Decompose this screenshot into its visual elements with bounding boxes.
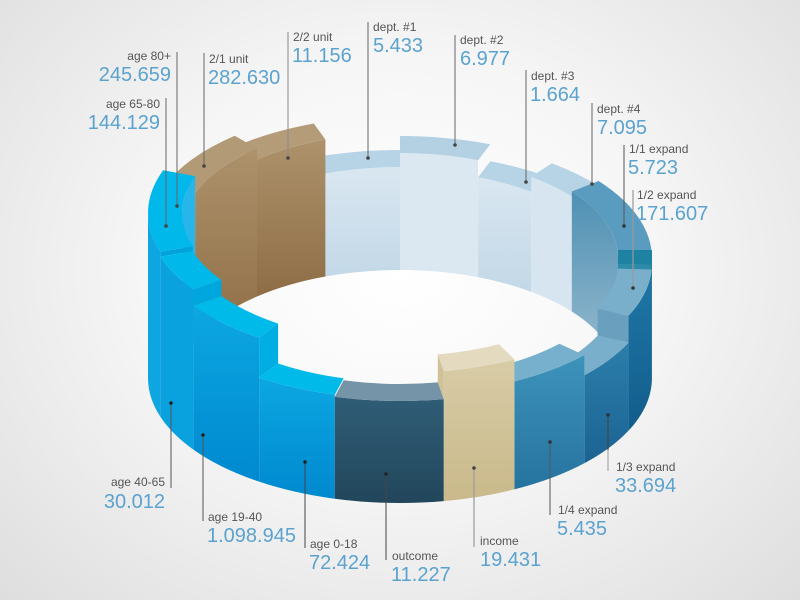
segment: age 0-18 — [259, 324, 344, 499]
callout: 2/1 unit: 282.630 — [208, 67, 280, 89]
callout: income: 19.431 — [480, 549, 541, 571]
callout: dept. #2 — [453, 33, 510, 147]
segment: dept #3 — [478, 161, 552, 292]
segment: 1/1 expand — [572, 181, 652, 384]
callout: 1/1 expand: 5.723 — [628, 157, 678, 179]
callout: 1/3 expand: 1/3 expand — [616, 460, 675, 474]
callout: age 80+ — [99, 49, 179, 208]
callout: dept. #3 — [524, 69, 580, 184]
callout: age 40-65: 30.012 — [104, 491, 165, 513]
callout: 2/2 unit — [286, 30, 352, 160]
segment: income — [438, 344, 514, 501]
segment: 1/2 expand — [598, 269, 652, 431]
callout: 2/1 unit — [202, 52, 280, 168]
callout: age 65-80: 144.129 — [88, 112, 160, 134]
segment: age 19-40 — [194, 280, 278, 482]
callout: dept. #2: 6.977 — [460, 48, 510, 70]
callout: dept. #1: 5.433 — [373, 35, 423, 57]
callout: age 80+: 245.659 — [99, 64, 171, 86]
callout: income: income — [480, 534, 519, 548]
callout: dept. #3: 1.664 — [530, 84, 580, 106]
callout: 1/4 expand: 5.435 — [557, 518, 607, 540]
callout: dept. #4: 7.095 — [597, 117, 647, 139]
segment: age 65-80 / 80+ — [148, 170, 195, 417]
callout: age 0-18: 72.424 — [309, 552, 370, 574]
callout: income — [472, 466, 541, 571]
callout: age 65-80 — [88, 97, 168, 228]
callout: 1/3 expand — [606, 413, 676, 497]
callout: 2/1 unit: 2/1 unit — [209, 52, 249, 66]
callout: 1/3 expand: 33.694 — [615, 475, 676, 497]
callout: dept. #1 — [366, 20, 423, 160]
callout: dept. #2: dept. #2 — [460, 33, 504, 47]
segment: age 40-65 — [160, 251, 221, 450]
callout: age 65-80: age 65-80 — [106, 97, 160, 111]
callout: outcome: outcome — [392, 549, 438, 563]
callout: age 40-65: age 40-65 — [111, 475, 165, 489]
segment: dept #1 — [314, 150, 400, 276]
callout: 2/2 unit: 2/2 unit — [293, 30, 333, 44]
segment: 1/3 expand — [559, 336, 628, 463]
callout: outcome: 11.227 — [391, 564, 451, 586]
callout: 2/2 unit: 11.156 — [292, 45, 352, 67]
segment: 2/2 unit — [235, 124, 325, 296]
callout: dept. #4 — [590, 102, 647, 186]
segment: 2/1 unit — [163, 136, 257, 341]
callout: 1/4 expand: 1/4 expand — [558, 503, 617, 517]
callout: 1/1 expand: 1/1 expand — [629, 142, 688, 156]
callout: 1/2 expand: 1/2 expand — [637, 188, 696, 202]
segment: 1/4 expand — [499, 344, 584, 489]
callout: age 19-40 — [201, 433, 296, 547]
callout: 1/1 expand — [622, 142, 688, 228]
segment: outcome — [335, 380, 444, 503]
callout: dept. #3: dept. #3 — [531, 69, 575, 83]
callout: 1/2 expand: 171.607 — [636, 203, 708, 225]
callout: dept. #4: dept. #4 — [597, 102, 641, 116]
callout: 1/4 expand — [548, 440, 617, 540]
callout: age 0-18 — [303, 460, 370, 574]
callout: age 40-65 — [104, 401, 173, 513]
segment: dept #4 — [531, 163, 599, 312]
segment: dept #2 — [400, 136, 490, 277]
callout: age 19-40: age 19-40 — [208, 510, 262, 524]
callout: age 0-18: age 0-18 — [310, 537, 358, 551]
callout: age 19-40: 1.098.945 — [207, 525, 296, 547]
callout: outcome — [384, 472, 451, 586]
callout: age 80+: age 80+ — [127, 49, 171, 63]
callout: 1/2 expand — [631, 188, 708, 290]
callout: dept. #1: dept. #1 — [373, 20, 417, 34]
